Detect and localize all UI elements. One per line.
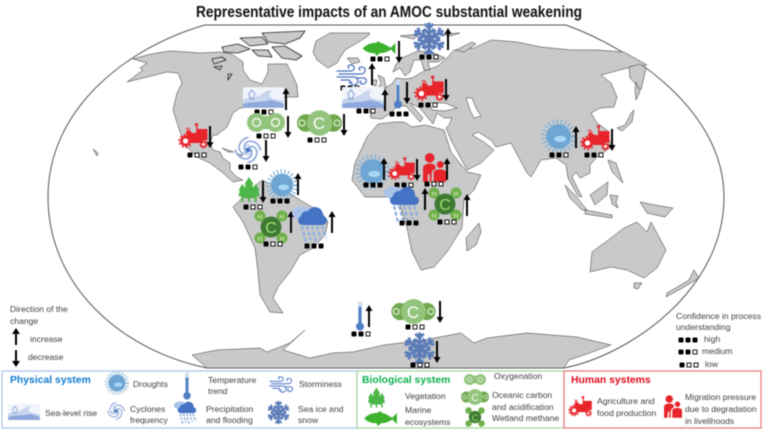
impact: migration pressure, Africa xyxy=(423,153,450,186)
label: migration pressure: in livelihoods xyxy=(685,416,734,426)
impact: wetland methane, East Africa xyxy=(428,188,470,224)
icon: wetland methane xyxy=(465,407,485,427)
icon: oceanic carbon xyxy=(461,389,489,405)
arrow: increase xyxy=(12,328,20,345)
label: sea ice and snow: snow xyxy=(298,415,319,425)
impact: agriculture, Europe xyxy=(415,76,450,108)
impact: oxygenation, North Atlantic xyxy=(247,113,292,138)
impact: wetland methane, East Africa: H xyxy=(454,191,459,198)
icon: cyclones frequency xyxy=(108,403,124,419)
impact: sea-level rise, Europe xyxy=(342,87,388,114)
Black Sea xyxy=(430,103,457,111)
panel: human systems xyxy=(564,371,761,428)
impact: cyclones frequency, Caribbean xyxy=(235,137,270,170)
legend: confidence in process understanding: Confidence in process xyxy=(676,311,761,321)
Svalbard, Novaya Zemlya and Arctic islands xyxy=(400,33,476,52)
label: vegetation: Vegetation xyxy=(405,391,446,401)
impact: wetland methane, East Africa: C xyxy=(439,197,451,214)
legend: direction of the change xyxy=(10,304,68,367)
impact: agriculture, Sahel xyxy=(389,157,420,188)
Greenland xyxy=(313,33,370,68)
label: migration pressure: Migration pressure xyxy=(685,392,756,402)
label: oceanic carbon and acidification: Oceanic carbon xyxy=(492,390,552,400)
title: Representative impacts of an AMOC substantial weakening xyxy=(196,4,582,21)
impact: agriculture, China xyxy=(581,125,616,158)
legend: confidence in process understanding: high xyxy=(704,334,720,344)
Japan and Sakhalin xyxy=(617,82,640,131)
legend: direction of the change: increase xyxy=(30,334,63,344)
Tasmania xyxy=(634,283,642,289)
icon: precipitation and flooding xyxy=(174,401,196,424)
label: cyclones frequency: Cyclones xyxy=(130,404,165,414)
icon: wetland methane: C xyxy=(472,413,479,423)
legend: confidence in process understanding xyxy=(676,311,761,369)
Cuba, Hispaniola and Hawaii xyxy=(93,148,243,157)
label: oxygenation: Oxygenation xyxy=(494,371,542,381)
panel: biological system xyxy=(357,371,564,428)
impact: droughts, West Africa xyxy=(359,158,388,188)
New Zealand xyxy=(666,270,699,297)
Maritime Southeast Asia xyxy=(565,160,673,218)
heading: physical system: Physical system xyxy=(10,375,91,386)
impact: precipitation and flooding, Central Africa xyxy=(384,186,428,226)
impact: temperature trend, Europe xyxy=(390,80,410,116)
legend: confidence in process understanding: medium xyxy=(702,346,733,356)
label: wetland methane: Wetland methane xyxy=(492,413,559,423)
impact: agriculture, Mexico xyxy=(179,123,214,158)
label: precipitation and flooding: Precipitation xyxy=(206,404,253,414)
impact: oceanic carbon, Southern Ocean xyxy=(391,299,444,330)
Africa xyxy=(352,122,481,270)
heading: biological system: Biological system xyxy=(362,375,450,386)
Antarctica xyxy=(192,330,611,368)
impact: wetland methane, South America: H xyxy=(258,236,263,243)
label: cyclones frequency: frequency xyxy=(130,415,168,425)
panel: physical system xyxy=(2,371,357,428)
label: migration pressure: due to degradation xyxy=(685,404,757,414)
label: oceanic carbon and acidification: and acidification xyxy=(492,402,554,412)
impact: sea-level rise, North America xyxy=(243,87,290,114)
Canadian Arctic islands xyxy=(212,31,305,80)
label: sea-level rise: Sea-level rise xyxy=(45,408,97,418)
world map xyxy=(48,25,724,368)
impact: droughts, South Asia xyxy=(545,123,580,158)
Australia xyxy=(590,222,666,278)
label: droughts: Droughts xyxy=(133,379,168,389)
legend: direction of the change: Direction of the xyxy=(10,304,68,314)
impact: sea ice and snow, Arctic xyxy=(412,22,452,59)
Madagascar xyxy=(466,223,481,251)
South America xyxy=(233,180,328,313)
impact: wetland methane, South America: H xyxy=(258,214,263,221)
impact: precipitation and flooding, South America xyxy=(292,206,336,248)
impact: oceanic carbon, Southern Ocean: C xyxy=(407,303,419,322)
impact: sea ice and snow, Antarctica xyxy=(403,332,440,368)
legend: confidence in process understanding: understanding xyxy=(676,322,731,332)
legend: confidence in process understanding: low xyxy=(705,359,719,369)
impact: vegetation, Amazon xyxy=(238,177,266,210)
impact: droughts, northern South America xyxy=(270,173,302,204)
impact: wetland methane, East Africa: H xyxy=(432,191,437,198)
label: precipitation and flooding: and flooding xyxy=(206,415,253,425)
heading: human systems: Human systems xyxy=(571,375,651,386)
legend: direction of the change: change xyxy=(10,316,38,326)
impact: storminess, Europe xyxy=(336,63,376,90)
impact: marine ecosystems, North Atlantic xyxy=(363,41,402,63)
impact: temperature trend, Southern Ocean xyxy=(352,302,372,336)
icon: droughts xyxy=(108,374,126,392)
label: temperature trend: Temperature xyxy=(208,375,256,385)
icon: oxygenation xyxy=(464,374,486,385)
icon: sea ice and snow xyxy=(267,401,290,424)
label: marine ecosystems: Marine xyxy=(405,405,431,415)
impact: wetland methane, South America: C xyxy=(265,220,277,237)
icon: temperature trend xyxy=(183,372,191,400)
label: marine ecosystems: ecosystems xyxy=(405,417,450,427)
icon: sea-level rise xyxy=(8,404,40,420)
label: temperature trend: trend xyxy=(208,386,228,396)
icon: oceanic carbon: C xyxy=(471,393,479,404)
impact: oceanic carbon, North Atlantic: C xyxy=(313,114,325,133)
impact: wetland methane, South America: H xyxy=(280,236,285,243)
icon: marine ecosystems xyxy=(364,411,397,426)
icon: migration xyxy=(664,395,682,418)
label: storminess: Storminess xyxy=(299,379,342,389)
North America xyxy=(127,51,298,182)
label: agriculture and food production: Agriculture and xyxy=(597,396,655,406)
label: agriculture and food production: food production xyxy=(597,408,656,418)
Caspian Sea xyxy=(466,98,481,118)
label: sea ice and snow: Sea ice and xyxy=(298,404,343,414)
icon: vegetation xyxy=(368,387,385,408)
legend: direction of the change: decrease xyxy=(28,352,64,362)
Eurasia xyxy=(369,40,647,197)
Kamchatka xyxy=(629,64,646,90)
Scandinavia xyxy=(393,51,445,76)
impact: wetland methane, South America xyxy=(254,210,294,246)
Great Britain, Ireland and Iceland xyxy=(347,58,386,89)
impact: wetland methane, South America: H xyxy=(280,214,285,221)
impact: wetland methane, East Africa: H xyxy=(454,213,459,220)
icon: agriculture xyxy=(569,396,592,416)
arrow: decrease xyxy=(12,350,20,367)
icon: storminess xyxy=(269,377,293,392)
impact: oceanic carbon, North Atlantic xyxy=(297,110,348,142)
impact: wetland methane, East Africa: H xyxy=(432,213,437,220)
